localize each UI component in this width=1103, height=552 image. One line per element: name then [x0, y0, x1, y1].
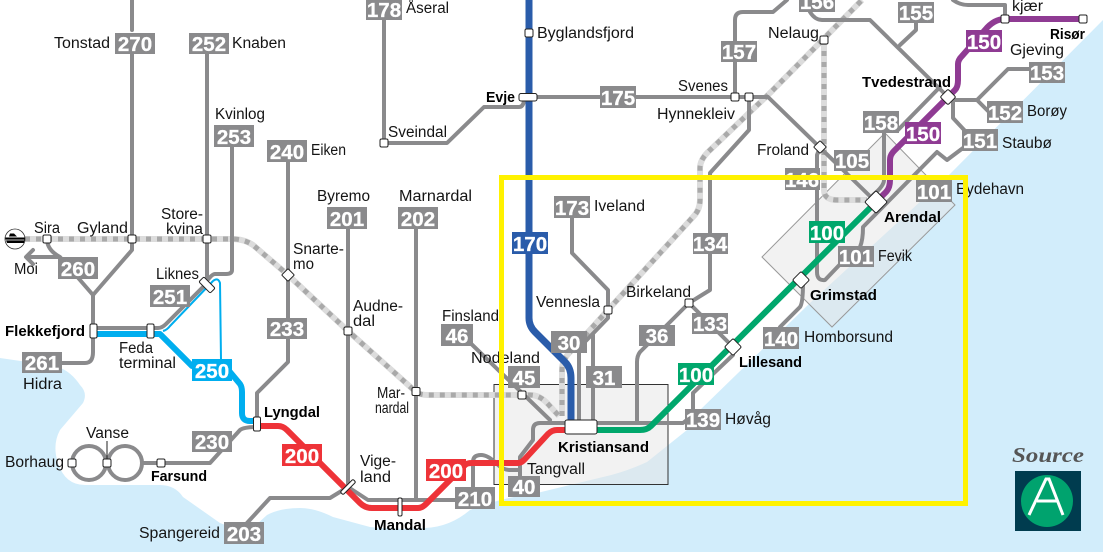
place names: Liknes: [156, 266, 199, 283]
road 202: [414, 229, 418, 500]
place names: Byremo: [317, 188, 370, 205]
place names: Snarte-: [293, 241, 344, 258]
badge 253: 253: [217, 126, 251, 149]
badge 36: [639, 325, 675, 348]
place names: Gjeving: [1010, 42, 1064, 59]
badge 250 blue: 250: [195, 360, 229, 383]
badge 157: 157: [722, 41, 756, 64]
place names: Moi: [14, 261, 38, 278]
badge 200 red right: 200: [429, 460, 463, 483]
place names: Nelaug: [768, 25, 819, 42]
place names: Staubø: [1002, 135, 1053, 152]
place names: Hynnekleiv: [657, 106, 735, 123]
badge 30: [551, 331, 587, 355]
place names: Grimstad: [810, 287, 877, 304]
place names: Sveindal: [388, 124, 447, 141]
road 240 and 233: [257, 162, 288, 423]
place names: Tangvall: [527, 461, 585, 478]
badge 45: [508, 366, 540, 390]
road 140: [780, 283, 803, 327]
place names: Eiken: [311, 142, 346, 159]
badge 155: 155: [899, 2, 933, 25]
place names: Sira: [34, 220, 60, 237]
yellow highlight frame: [502, 178, 966, 504]
place names: mo: [293, 256, 314, 273]
place names: Lillesand: [739, 354, 802, 371]
road 175: [537, 97, 877, 203]
badge 170 blue: 170: [513, 233, 547, 256]
badge 139: 139: [686, 409, 720, 432]
badge 140 lower: 140: [764, 328, 798, 351]
inset box: Arendal and Grimstad area: [762, 133, 955, 327]
place names: Gyland: [77, 220, 128, 237]
place names: Knaben: [232, 35, 286, 52]
badge 31: 31: [593, 367, 615, 390]
road 139: [565, 355, 733, 423]
railway lines: [25, 0, 867, 416]
route 100 green line: [596, 202, 876, 430]
icon: source logo: [1015, 471, 1081, 531]
badge 202: 202: [401, 208, 435, 231]
badge 251: 251: [153, 286, 187, 309]
place names: Arendal: [884, 209, 941, 226]
badge 101 Fevik: 101: [839, 246, 873, 269]
road 270: [60, 0, 132, 363]
badge 134: 134: [693, 233, 728, 256]
road 210: [473, 455, 520, 487]
road 230 Farsund and Borhaug loops: [72, 427, 257, 480]
badge 240: 240: [270, 141, 304, 164]
badge 152: 152: [988, 102, 1022, 125]
road 40: [520, 423, 565, 476]
badge 233: 233: [270, 318, 304, 341]
road 203: [247, 487, 348, 523]
badge 158: 158: [864, 112, 898, 135]
road 46: [460, 333, 550, 420]
place names: Spangereid: [139, 525, 220, 542]
road to kjaer: [953, 0, 1005, 19]
place names: Vige-: [360, 453, 396, 470]
badge 200 red left: 200: [285, 445, 319, 468]
place names: Feda: [119, 340, 153, 357]
place names: dal: [353, 313, 375, 330]
badge 261: 261: [25, 352, 59, 375]
road 155: [900, 23, 916, 45]
place names: Vennesla: [536, 294, 600, 311]
badge 270: 270: [118, 33, 152, 56]
road 158: [873, 133, 884, 195]
place names: Mar-: [377, 385, 405, 402]
place names: Høvåg: [725, 411, 771, 428]
place names: Svenes: [678, 78, 728, 95]
badge 46: 46: [446, 325, 468, 348]
road 178: [384, 20, 524, 143]
route 150 purple line: [876, 19, 1083, 202]
place names: Birkeland: [626, 284, 691, 301]
badge 210: 210: [458, 488, 492, 511]
road parallel to route 150: [897, 87, 940, 131]
road 156: [810, 12, 948, 97]
road 252: [205, 54, 209, 283]
place names: land: [360, 469, 391, 486]
road 151 branch: [953, 100, 967, 133]
inset box: Kristiansand area: [494, 384, 668, 484]
badge 146: 146: [785, 169, 819, 192]
place names: Lyngdal: [264, 404, 320, 421]
source heading: Source: [1012, 443, 1084, 467]
badge 100 green lower: 100: [679, 364, 713, 387]
place names: Flekkefjord: [5, 323, 85, 340]
place names: Homborsund: [804, 329, 893, 346]
road 31: [591, 335, 595, 420]
place names: Byglandsfjord: [537, 25, 634, 42]
place names: Borhaug: [5, 454, 64, 471]
road 153 and 152: [948, 69, 1030, 113]
badge 36: 36: [646, 325, 668, 348]
place names: Store-: [161, 206, 203, 223]
place names: kvina: [166, 221, 203, 238]
badge 133: 133: [693, 313, 727, 336]
road 253: [207, 147, 232, 281]
place names: Eydehavn: [956, 181, 1024, 198]
place names: Risør: [1050, 26, 1085, 43]
badge 173: 173: [555, 197, 589, 220]
badge 230: 230: [195, 431, 229, 454]
badge 46: [441, 324, 473, 348]
badge 101 Eydehavn: 101: [917, 181, 951, 204]
road 260 and Moi arrow: [26, 239, 93, 295]
badge 30: 30: [558, 332, 580, 355]
place names: Kristiansand: [558, 439, 649, 456]
road 251: [93, 283, 207, 328]
badge 151: 151: [963, 130, 997, 153]
place names: nardal: [375, 400, 409, 417]
badge 150 purple upper: 150: [967, 31, 1001, 54]
place names: Farsund: [151, 468, 207, 485]
route 200 red line: [260, 426, 566, 508]
badge 105: 105: [835, 150, 869, 173]
road 173 and 30: [572, 218, 608, 420]
thin blue route 250 branch: [163, 279, 221, 360]
badge 175: 175: [601, 87, 635, 110]
badge 203: 203: [227, 523, 261, 546]
place names: Tonstad: [54, 35, 110, 52]
place names: Iveland: [594, 198, 645, 215]
place names: Froland: [757, 142, 809, 159]
badge 153: 153: [1030, 62, 1064, 85]
badge 45: 45: [513, 367, 535, 390]
place names: Evje: [486, 89, 515, 106]
place names: Mandal: [374, 517, 426, 534]
badge 260: 260: [61, 258, 95, 281]
badge 40: 40: [513, 476, 535, 499]
road 157: [735, 0, 787, 97]
road 201: [348, 229, 455, 500]
road 36: [637, 303, 689, 422]
route 170 dark blue line: [529, 0, 571, 421]
road 146: [817, 147, 847, 280]
place names: Tvedestrand: [862, 74, 951, 91]
place names: Kvinlog: [215, 106, 265, 123]
badge 100 green upper: 100: [810, 222, 844, 245]
place names: Finsland: [442, 308, 499, 325]
road 133: [689, 303, 733, 347]
place names: Vanse: [86, 425, 129, 442]
place names: Audne-: [353, 298, 403, 315]
road 134: [689, 97, 749, 303]
place names: Hidra: [23, 376, 62, 393]
badge 150 purple lower: 150: [906, 123, 940, 146]
badge 201: 201: [330, 208, 364, 231]
place names: Nodeland: [471, 350, 540, 367]
badge 31: [586, 366, 622, 390]
road 101 and 151: [860, 148, 963, 247]
badge 252: 252: [192, 33, 226, 56]
place names: Borøy: [1027, 103, 1067, 120]
route 250 thick blue line: [93, 334, 257, 421]
Vanse tick: [106, 441, 108, 463]
place names: terminal: [119, 355, 176, 372]
place names: Fevik: [878, 248, 912, 265]
icon: ferry: [5, 229, 25, 249]
place names: Åseral: [406, 0, 449, 17]
place names: Marnardal: [399, 188, 472, 205]
